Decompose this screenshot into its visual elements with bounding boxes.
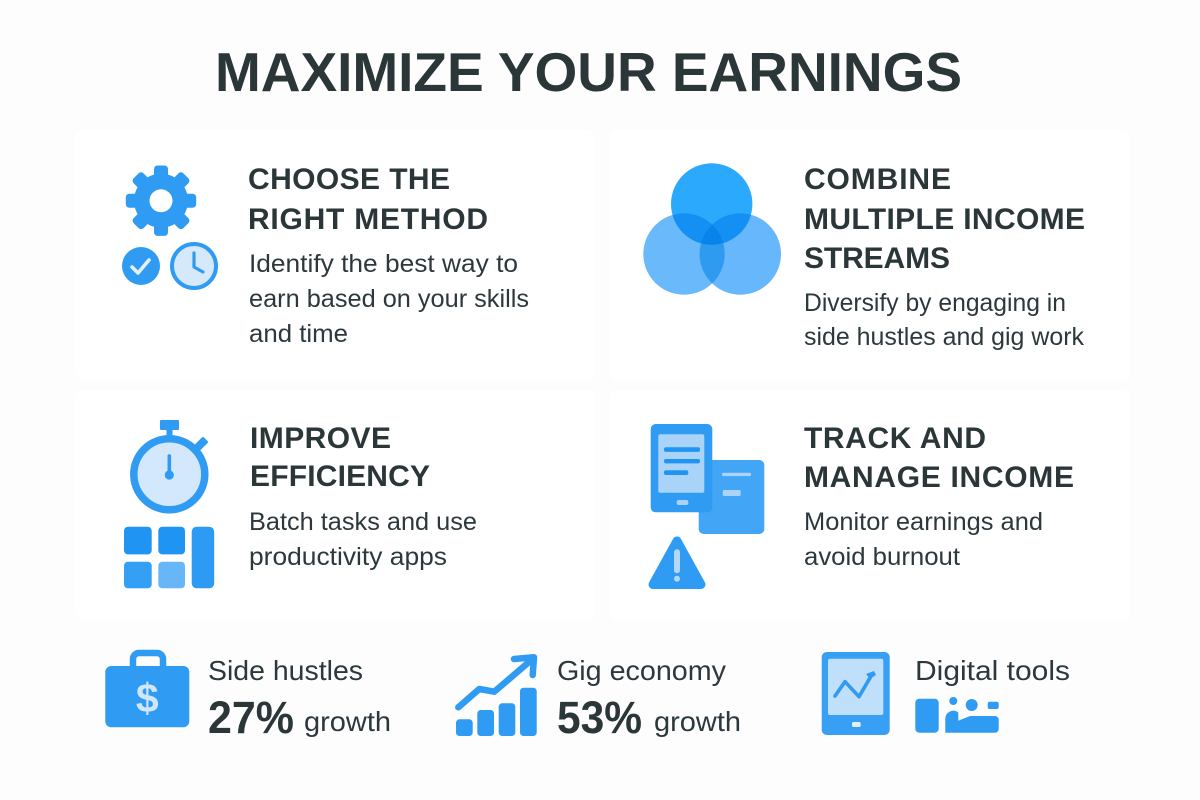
- text: gig economy 53% growth: growth: [654, 706, 741, 737]
- heading: track and manage income: [804, 422, 1074, 494]
- heading: choose the right method: CHOOSE THE: [248, 163, 450, 196]
- title: MAXIMIZE YOUR EARNINGS: [215, 41, 962, 103]
- icon: stopwatch and app grid: [124, 420, 214, 588]
- heading: improve efficiency: EFFICIENCY: [250, 460, 430, 493]
- panel: track and manage income: [610, 390, 1130, 620]
- icon: briefcase with dollar: $: [136, 675, 159, 721]
- text: combine description: [804, 289, 1084, 351]
- text: side hustles 27% growth: [208, 655, 391, 743]
- icon: small tool shapes: [915, 697, 999, 733]
- text: improve efficiency description: [249, 508, 477, 571]
- text: track and manage description: Monitor earnings and: [804, 508, 1043, 536]
- text: side hustles 27% growth: Side hustles: [208, 655, 363, 686]
- text: track and manage description: avoid burnout: [804, 543, 960, 571]
- text: gig economy 53% growth: [557, 655, 741, 743]
- heading: improve efficiency: [250, 422, 430, 493]
- heading: choose the right method: [248, 163, 488, 236]
- icon: briefcase with dollar: [105, 653, 189, 727]
- text: combine description: side hustles and gig work: [804, 323, 1084, 351]
- text: combine description: Diversify by engaging in: [804, 289, 1066, 317]
- icon: overlapping circles: [643, 163, 781, 295]
- heading: combine multiple income streams: STREAMS: [804, 242, 950, 275]
- text: choose the right method description: and time: [249, 320, 348, 348]
- text: choose the right method description: [249, 250, 529, 348]
- heading: track and manage income: TRACK AND: [804, 422, 986, 455]
- panel: combine multiple income streams: [643, 163, 1084, 350]
- heading: track and manage income: MANAGE INCOME: [804, 461, 1074, 494]
- stat: gig economy: [456, 655, 741, 743]
- icon: growth bar chart with arrow: [456, 657, 537, 736]
- heading: improve efficiency: IMPROVE: [250, 422, 391, 455]
- text: improve efficiency description: Batch tasks and use: [249, 508, 477, 536]
- heading: combine multiple income streams: COMBINE: [804, 163, 951, 196]
- heading: choose the right method: RIGHT METHOD: [248, 203, 488, 236]
- panel: choose the right method: [75, 130, 595, 380]
- text: choose the right method description: earn based on your skills: [249, 285, 529, 313]
- text: gig economy 53% growth: 53%: [557, 692, 642, 743]
- icon: gear with check and clock: [122, 166, 216, 288]
- stat: digital tools: [822, 652, 1070, 735]
- text: side hustles 27% growth: 27%: [208, 692, 294, 743]
- stat: side hustles: [105, 653, 391, 743]
- text: side hustles 27% growth: growth: [304, 706, 391, 737]
- text: improve efficiency description: productivity apps: [249, 543, 447, 571]
- heading: combine multiple income streams: MULTIPLE INCOME: [804, 203, 1085, 236]
- text: track and manage description: [804, 508, 1043, 571]
- text: gig economy 53% growth: Gig economy: [557, 655, 726, 686]
- text: digital tools label: Digital tools: [915, 655, 1070, 686]
- heading: combine multiple income streams: [804, 163, 1085, 275]
- text: choose the right method description: Identify the best way to: [249, 250, 518, 278]
- icon: tablet with trend line: [822, 652, 890, 735]
- panel: improve efficiency: [75, 390, 595, 620]
- icon: devices and warning: [651, 424, 764, 584]
